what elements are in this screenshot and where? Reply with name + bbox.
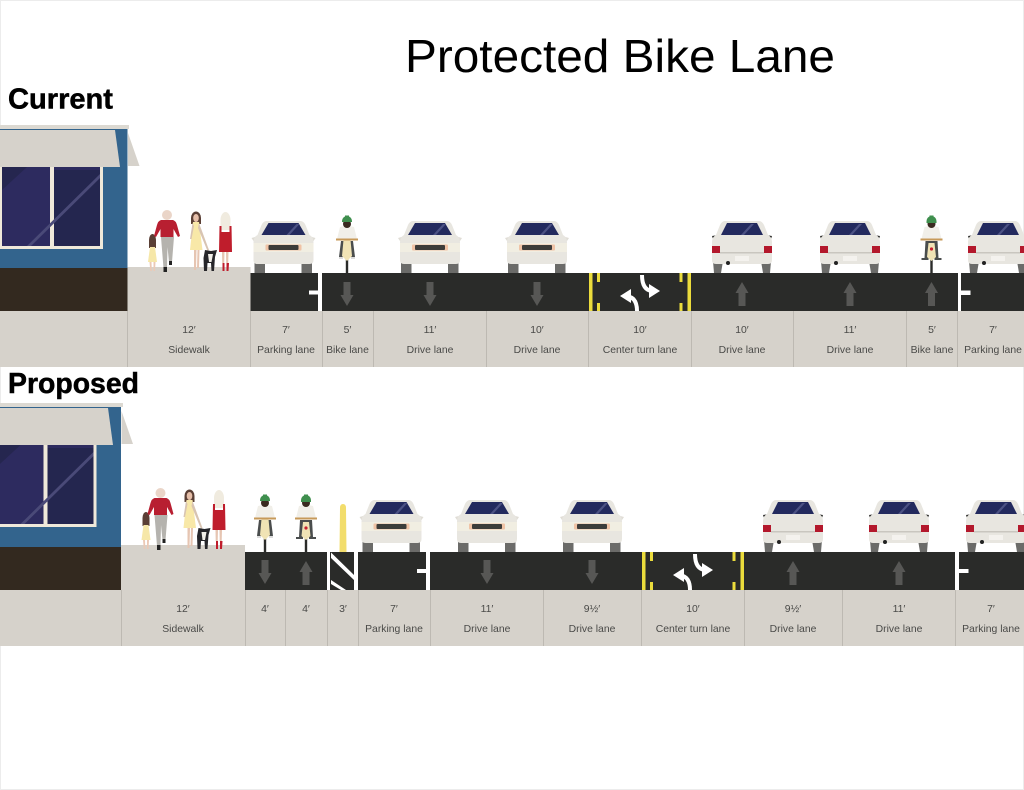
lane labels: 5′ bbox=[928, 325, 936, 336]
lane labels: Drive lane bbox=[407, 345, 454, 356]
car: parking lane bbox=[360, 500, 424, 552]
lane labels: Drive lane bbox=[876, 624, 923, 635]
cyclist: southbound bikeway bbox=[254, 494, 276, 552]
building bbox=[0, 403, 133, 590]
car: northbound drive lane bbox=[712, 221, 772, 273]
lane labels: 7′ bbox=[989, 325, 997, 336]
lane labels: Sidewalk bbox=[168, 345, 211, 356]
lane labels: Drive lane bbox=[770, 624, 817, 635]
car: drive lane bbox=[560, 500, 624, 552]
lane labels: Drive lane bbox=[569, 624, 616, 635]
lane labels: Drive lane bbox=[464, 624, 511, 635]
cyclist: southbound bike lane bbox=[336, 216, 358, 273]
lane labels: Center turn lane bbox=[603, 345, 677, 356]
asphalt bbox=[245, 552, 1024, 590]
lane labels: 4′ bbox=[261, 604, 269, 615]
lane labels: 11′ bbox=[893, 604, 905, 615]
pedestrians and dog bbox=[142, 488, 226, 550]
lane labels: 9½′ bbox=[584, 604, 600, 615]
lane labels: 7′ bbox=[390, 604, 398, 615]
buffer hatching bbox=[331, 552, 354, 590]
lane labels: Parking lane bbox=[962, 624, 1020, 635]
lane labels: Drive lane bbox=[827, 345, 874, 356]
lane labels: 12′ bbox=[182, 325, 196, 336]
lane labels: Bike lane bbox=[326, 345, 369, 356]
car: drive lane bbox=[398, 221, 462, 273]
lane labels: Center turn lane bbox=[656, 624, 730, 635]
sidewalk bbox=[121, 545, 245, 590]
lane labels: 12′ bbox=[176, 604, 190, 615]
pedestrians and dog bbox=[148, 210, 232, 272]
lane labels: 10′ bbox=[686, 604, 700, 615]
lane labels: 10′ bbox=[633, 325, 647, 336]
car: drive lane bbox=[505, 221, 569, 273]
lane labels: 10′ bbox=[735, 325, 749, 336]
lane label strip bbox=[0, 590, 1024, 646]
lane labels: 4′ bbox=[302, 604, 310, 615]
lane labels: Parking lane bbox=[257, 345, 315, 356]
lane labels: 10′ bbox=[530, 325, 544, 336]
cyclist: northbound bikeway bbox=[295, 494, 317, 552]
asphalt bbox=[250, 273, 1024, 311]
lane labels: 5′ bbox=[344, 325, 351, 336]
lane labels: 9½′ bbox=[785, 604, 801, 615]
bollard bbox=[340, 504, 346, 552]
building bbox=[0, 125, 140, 311]
car: far parking lane bbox=[966, 500, 1024, 552]
car: northbound drive lane bbox=[820, 221, 880, 273]
center turn lane markings bbox=[589, 273, 691, 311]
lane labels: 11′ bbox=[481, 604, 493, 615]
car: drive lane bbox=[455, 500, 519, 552]
center turn lane markings bbox=[642, 552, 744, 590]
lane labels: Drive lane bbox=[719, 345, 766, 356]
heading: current: Current bbox=[8, 84, 113, 116]
cyclist: northbound bike lane bbox=[920, 216, 942, 273]
arrows: lane directions bbox=[258, 560, 906, 585]
lane labels: 7′ bbox=[987, 604, 995, 615]
lane labels: 7′ bbox=[282, 325, 290, 336]
panel: current street section bbox=[0, 125, 1024, 367]
lane label strip bbox=[0, 311, 1024, 367]
lane labels: 11′ bbox=[424, 325, 436, 336]
sidewalk bbox=[128, 267, 250, 311]
lane labels: 11′ bbox=[844, 325, 856, 336]
car: northbound drive lane bbox=[763, 500, 823, 552]
lane labels: Bike lane bbox=[911, 345, 954, 356]
lane labels bbox=[168, 325, 1022, 356]
lane labels: Parking lane bbox=[964, 345, 1022, 356]
panel: proposed street section bbox=[0, 403, 1024, 646]
car: parking lane bbox=[252, 221, 316, 273]
lane labels bbox=[162, 604, 1020, 635]
lane labels: Drive lane bbox=[514, 345, 561, 356]
car: northbound drive lane bbox=[869, 500, 929, 552]
arrows: lane directions bbox=[340, 282, 938, 306]
lane labels: 3′ bbox=[339, 604, 347, 615]
title: Protected Bike Lane bbox=[405, 30, 835, 82]
lane labels: Parking lane bbox=[365, 624, 423, 635]
lane labels: Sidewalk bbox=[162, 624, 205, 635]
heading: proposed: Proposed bbox=[8, 368, 139, 400]
car: far parking lane bbox=[968, 221, 1024, 273]
